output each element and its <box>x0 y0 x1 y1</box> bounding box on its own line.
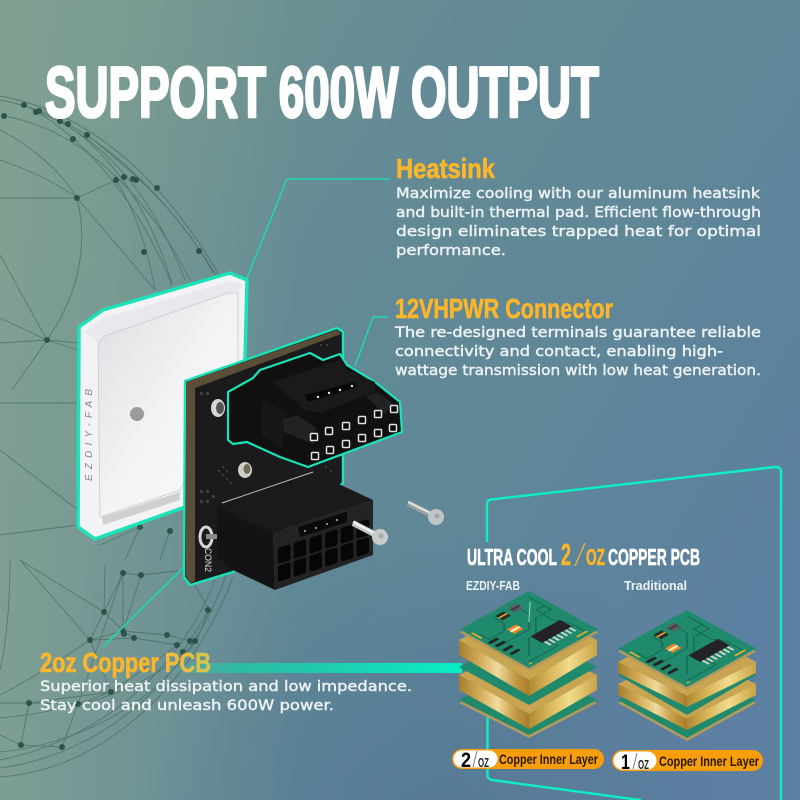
lower connector pin recess <box>298 512 347 537</box>
description: connector <box>394 325 761 379</box>
badge: 1 oz copper inner layer: Copper Inner Layer <box>659 754 760 769</box>
leader line: copper PCB <box>103 566 185 647</box>
leader line: connector <box>355 317 388 366</box>
comparison heading: COPPER PCB <box>608 544 700 570</box>
PCB top board <box>460 591 598 671</box>
description: copper PCB <box>40 679 412 714</box>
center standoff <box>238 462 252 478</box>
description: connector: connectivity and contact, enabling high- <box>395 344 723 360</box>
description: connector: wattage transmission with low heat generation. <box>395 363 761 379</box>
lower mounting screw hole <box>200 527 218 547</box>
description: heatsink: Maximize cooling with our aluminum heatsink <box>396 186 761 202</box>
badge: 1 oz copper inner layer: OZ <box>638 757 649 772</box>
badge: 2 oz copper inner layer <box>452 749 604 772</box>
heatsink plate <box>78 273 247 539</box>
badge: 2 oz copper inner layer: Copper Inner Layer <box>499 752 599 767</box>
network globe pattern <box>0 96 233 777</box>
heading: heatsink: Heatsink <box>396 153 495 184</box>
lower connector sockets <box>278 519 369 582</box>
badge: 1 oz copper inner layer <box>612 750 763 774</box>
description: heatsink: design eliminates trapped heat for optimal <box>396 224 761 240</box>
silkscreen label: CON2 <box>203 548 213 572</box>
heading: copper PCB: 2oz Copper PCB <box>40 647 211 678</box>
circuit board <box>184 328 343 585</box>
badge: 2 oz copper inner layer: 2 <box>461 749 471 772</box>
latch pin window <box>305 382 357 402</box>
comparison heading: ULTRA COOL <box>467 544 557 570</box>
heatsink hole <box>130 407 144 421</box>
PCB top board traditional <box>618 610 756 690</box>
upper 12VHPWR connector <box>228 353 402 467</box>
network nodes <box>1 102 211 750</box>
comparison heading <box>467 537 700 572</box>
leader line: heatsink <box>247 179 390 278</box>
badge: 2 oz copper inner layer: OZ <box>478 755 489 770</box>
text block: 12VHPWR connector <box>394 293 761 379</box>
loose screw <box>408 502 444 525</box>
description: connector: The re-designed terminals guarantee reliable <box>394 325 761 341</box>
label: EZDIY-FAB: EZDIY-FAB <box>466 579 520 593</box>
comparison heading: OZ <box>586 544 605 570</box>
screw in connector <box>353 522 388 545</box>
upper mounting screw hole <box>211 399 225 417</box>
beam line to PCB graphic <box>170 663 462 673</box>
description: heatsink: and built-in thermal pad. Efficient flow-through <box>396 205 761 221</box>
text block: heatsink <box>396 153 761 259</box>
label: Traditional: Traditional <box>624 579 687 593</box>
PCB stack: traditional <box>618 610 756 741</box>
comparison heading: 2 <box>561 537 571 572</box>
heading: connector: 12VHPWR Connector <box>395 293 613 324</box>
badge: 1 oz copper inner layer: 1 <box>621 751 630 774</box>
panel outline: copper comparison <box>487 467 781 800</box>
description: heatsink: performance. <box>396 243 506 259</box>
text block: 2oz copper PCB <box>40 647 412 714</box>
lower connector <box>217 472 373 590</box>
description: heatsink <box>396 186 761 259</box>
description: copper PCB: Stay cool and unleash 600W power. <box>40 698 334 714</box>
connector terminals <box>310 406 398 460</box>
description: copper PCB: Superior heat dissipation and low impedance. <box>40 679 412 695</box>
heatsink engraving: EZDIY-FAB <box>84 389 95 481</box>
PCB stack: EZDIY-FAB <box>459 591 598 738</box>
